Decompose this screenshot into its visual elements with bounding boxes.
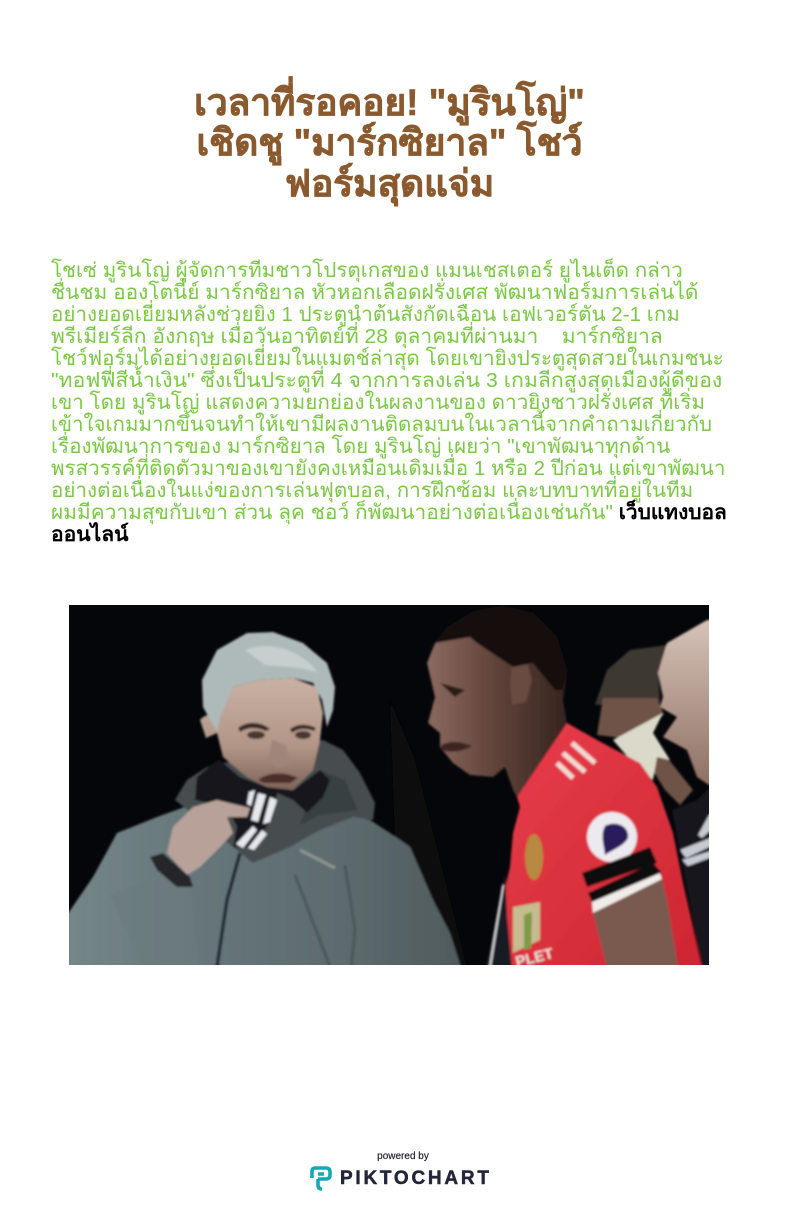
article text block: โชว์ฟอร์มได้อย่างยอดเยี่ยมในแมตช์ล่าสุด โดยเขายิงประตูสุดสวยในเกมชนะ	[51, 347, 724, 370]
player head	[427, 606, 567, 797]
second staff man	[595, 645, 667, 705]
shirt placket	[483, 873, 513, 980]
shadow figure	[390, 700, 470, 980]
article text block: "ทอฟฟี่สีน้ำเงิน" ซึ่งเป็นประตูที่ 4 จากการลงเล่น 3 เกมลีกสูงสุดเมืองผู้ดีของ	[51, 369, 722, 392]
article text block: เข้าใจเกมมากขึ้นจนทำให้เขามีผลงานติดลมบนในเวลานี้จากคำถามเกี่ยวกับ	[51, 413, 712, 436]
hand	[167, 800, 250, 875]
article text block: อย่างยอดเยี่ยมหลังช่วยยิง 1 ประตูนำต้นสังกัดเฉือน เอฟเวอร์ตัน 2-1 เกม	[51, 303, 680, 326]
article text block: ออนไลน์	[51, 523, 128, 546]
silver hair	[202, 632, 335, 732]
article text block: ผมมีความสุขกับเขา ส่วน ลุค ชอว์ ก็พัฒนาอย่างต่อเนื่องเช่นกัน" เว็บแทงบอล	[51, 501, 727, 524]
piktochart logo	[310, 1166, 492, 1191]
towel	[613, 713, 670, 780]
title: เชิดชู "มาร์กซิยาล" โชว์	[196, 122, 582, 163]
article text block: โชเซ่ มูรินโญ่ ผู้จัดการทีมชาวโปรตุเกสของ แมนเชสเตอร์ ยูไนเต็ด กล่าว	[51, 259, 683, 282]
hood	[175, 740, 375, 863]
face	[200, 678, 323, 790]
article text block: อย่างต่อเนื่องในแง่ของการเล่นฟุตบอล, การฝึกซ้อม และบทบาทที่อยู่ในทีม	[51, 479, 693, 502]
powered by label: powered by	[377, 1151, 429, 1162]
icon: piktochart mark	[310, 1166, 332, 1191]
sponsor logo	[513, 902, 540, 953]
neck gaiter	[195, 760, 330, 847]
article text block: เรื่องพัฒนาการของ มาร์กซิยาล โดย มูรินโญ่ เผยว่า "เขาพัฒนาทุกด้าน	[51, 435, 670, 458]
title: เวลาที่รอคอย! "มูรินโญ่"	[194, 82, 585, 123]
title	[194, 76, 585, 206]
player hair	[435, 606, 567, 690]
photo: manager and player	[69, 605, 709, 965]
article text block: ชื่นชม อองโตนี่ย์ มาร์กซิยาล หัวหอกเลือดฝรั่งเศส พัฒนาฟอร์มการเล่นได้	[51, 281, 698, 304]
article text block: พรีเมียร์ลีก อังกฤษ เมื่อวันอาทิตย์ที่ 28 ตุลาคมที่ผ่านมา มาร์กซิยาล	[51, 325, 663, 348]
article text block: พรสวรรค์ที่ติดตัวมาของเขายังคงเหมือนเดิมเมื่อ 1 หรือ 2 ปีก่อน แต่เขาพัฒนา	[51, 457, 725, 480]
article text block: เขา โดย มูรินโญ่ แสดงความยกย่องในผลงานของ ดาวยิงชาวฝรั่งเศส ที่เริ่ม	[51, 391, 705, 414]
red shirt	[483, 723, 705, 980]
bald man	[658, 620, 720, 785]
zipper	[215, 853, 240, 980]
dark jacket	[672, 788, 720, 980]
title: ฟอร์มสุดแจ่ม	[285, 163, 494, 204]
wordmark: PIKTOCHART	[340, 1168, 492, 1189]
coat body	[55, 800, 465, 980]
armband and arm	[582, 847, 657, 887]
article text block	[51, 258, 727, 546]
